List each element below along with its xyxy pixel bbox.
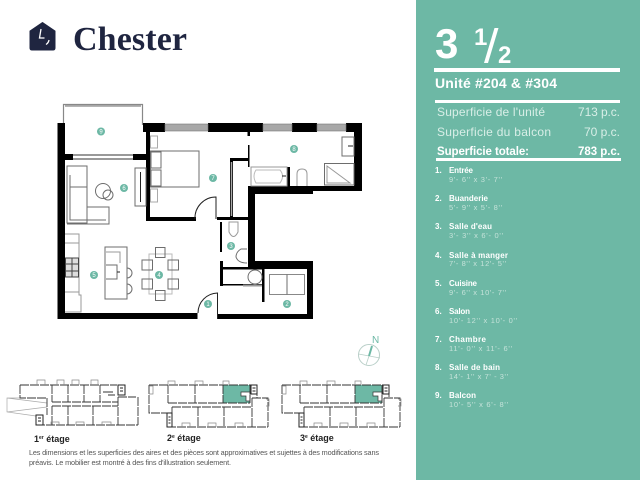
room list: 9'- 6'' x 3'- 7'': [449, 175, 503, 184]
furniture: bed: [150, 136, 199, 202]
room list: [435, 166, 518, 409]
room list: 6.: [435, 307, 442, 316]
fixtures: vanity: [342, 137, 354, 156]
area table: 713 p.c.: [578, 105, 620, 119]
fixtures: toilet: [297, 169, 307, 186]
floor plan: [58, 104, 362, 319]
key plan: 1st floor: [7, 380, 138, 425]
room markers: 9: [99, 130, 103, 136]
room list: Cuisine: [449, 279, 478, 288]
key plan label: 1st floor: 1: [34, 434, 39, 444]
compass: [358, 335, 380, 366]
furniture: sofa: [67, 166, 109, 224]
laundry: door strip: [243, 284, 262, 286]
room list: 9'- 6'' x 10'- 7'': [449, 288, 507, 297]
panel: unit details: [416, 0, 640, 480]
furniture: coffee table: [96, 184, 113, 200]
room list: 3.: [435, 222, 442, 231]
key plan: 2nd floor: [149, 381, 269, 427]
heading: unit type 3 1/2: 2: [498, 42, 511, 69]
room list: 14'- 1'' x 7' - 3'': [449, 372, 509, 381]
unit numbers: Unité #204 & #304: [435, 75, 557, 91]
laundry: water heater: [248, 270, 262, 284]
room list: 5.: [435, 279, 442, 288]
key plan label: 3rd floor: 3: [300, 433, 305, 443]
key plan label: 1st floor: er: [39, 435, 44, 441]
area table: Superficie du balcon: [437, 125, 551, 139]
furniture: bedroom 2 beds: [270, 274, 304, 294]
room list: 7'- 8'' x 12'- 5'': [449, 259, 507, 268]
room list: 10'- 5'' x 6'- 8'': [449, 400, 509, 409]
room list: Entrée: [449, 166, 474, 175]
key plan: 3rd floor: [282, 381, 401, 427]
key plan label: 3rd floor: étage: [308, 433, 334, 443]
heading: unit type 3 1/2: 3: [435, 20, 458, 67]
furniture: kitchen counter: [65, 234, 81, 312]
room markers: 2: [285, 302, 289, 308]
room markers: 6: [122, 186, 126, 192]
room list: Salle d'eau: [449, 222, 492, 231]
heading: unit type 3 1/2: 1: [474, 24, 487, 51]
room list: 11'- 0'' x 11'- 6'': [449, 344, 513, 353]
room list: 3'- 3'' x 6'- 0'': [449, 231, 504, 240]
heading: unit type 3 1/2: [435, 20, 511, 69]
disclaimer: préavis. Le mobilier est montré à des fins d'illustration seulement.: [29, 458, 231, 467]
fixtures: powder room sink: [236, 249, 247, 263]
furniture: island: [105, 247, 132, 299]
room list: Balcon: [449, 391, 476, 400]
room list: Salon: [449, 307, 470, 316]
room list: 4.: [435, 251, 442, 260]
area table: 783 p.c.: [578, 146, 620, 158]
fixtures: powder room toilet: [229, 222, 238, 236]
room list: 8.: [435, 363, 442, 372]
area table: Superficie totale:: [437, 146, 529, 158]
room list: Salle à manger: [449, 251, 508, 260]
room list: Buanderie: [449, 194, 489, 203]
brand name: Chester: [73, 21, 187, 58]
room markers: [90, 128, 298, 308]
room list: 2.: [435, 194, 442, 203]
room markers: 4: [157, 273, 161, 279]
compass: N: [372, 335, 379, 346]
disclaimer: [29, 448, 379, 467]
key plan label: 1st floor: étage: [44, 434, 70, 444]
room list: 1.: [435, 166, 442, 175]
room markers: 3: [229, 244, 233, 250]
furniture: TV unit: [135, 168, 146, 206]
furniture: dining table: [142, 248, 178, 300]
room markers: 1: [206, 302, 210, 308]
key plan label: 2nd floor: e: [172, 434, 175, 440]
room markers: 5: [92, 273, 96, 279]
walls: [58, 123, 362, 319]
closet door: [230, 162, 232, 216]
area table: [435, 100, 621, 161]
windows and balcony door: [165, 124, 346, 131]
balcony outline: [64, 104, 142, 154]
area table: 70 p.c.: [584, 125, 620, 139]
top rule: [434, 68, 620, 72]
room list: 9.: [435, 391, 442, 400]
room list: 7.: [435, 335, 442, 344]
icon: Chester logo: [30, 22, 55, 50]
room list: 5'- 9'' x 5'- 8'': [449, 203, 503, 212]
room list: 10'- 12'' x 10'- 0'': [449, 316, 518, 325]
key plan label: 2nd floor: étage: [175, 433, 201, 443]
fixtures: bath: [251, 167, 287, 186]
area table: Superficie de l'unité: [437, 105, 545, 119]
doors: [195, 197, 218, 319]
fixtures: shower: [324, 164, 354, 185]
key plan label: 2nd floor: 2: [167, 433, 172, 443]
disclaimer: Les dimensions et les superficies des aires et des pièces sont approximatives et sujettes à des modifications sans: [29, 448, 379, 457]
room markers: 7: [211, 176, 215, 182]
room markers: 8: [292, 147, 296, 153]
key plan label: 3rd floor: e: [305, 434, 308, 440]
room list: Salle de bain: [449, 363, 500, 372]
room list: Chambre: [449, 335, 487, 344]
